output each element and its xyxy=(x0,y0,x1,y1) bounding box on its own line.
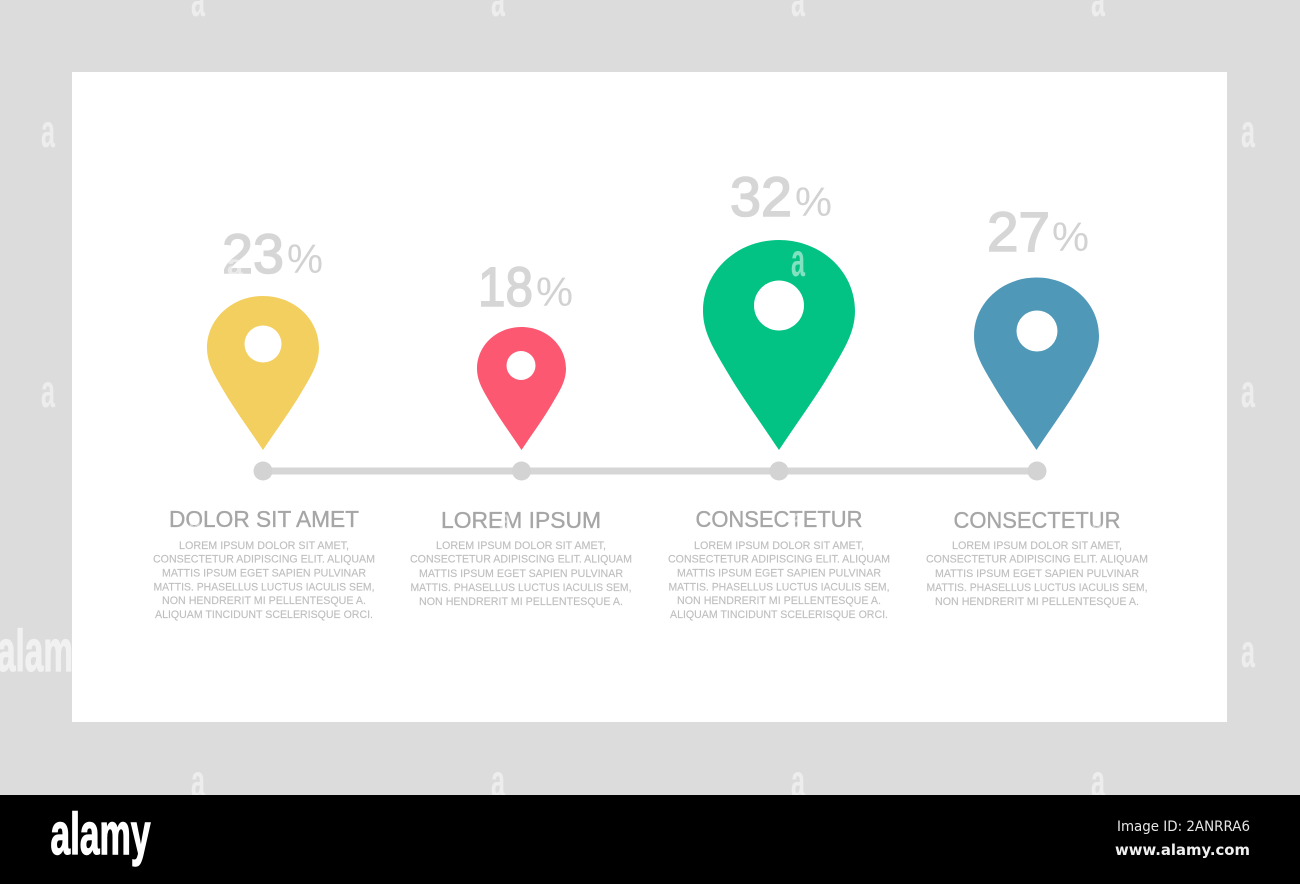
body text xyxy=(926,540,1148,608)
heading: a xyxy=(189,503,201,536)
heading: a xyxy=(1092,504,1102,537)
icon: green pin: a xyxy=(791,234,805,286)
body text xyxy=(410,540,632,608)
item 4: 27% consectetur xyxy=(926,200,1148,608)
body text: MATTIS IPSUM EGET SAPIEN PULVINAR xyxy=(419,568,623,580)
icon: blue pin xyxy=(974,278,1099,450)
body text: LOREM IPSUM DOLOR SIT AMET, xyxy=(436,540,606,552)
body text: MATTIS IPSUM EGET SAPIEN PULVINAR xyxy=(935,568,1139,580)
item 1: 23% dolor sit amet xyxy=(153,222,375,621)
timeline xyxy=(254,462,1046,480)
body text: LOREM IPSUM DOLOR SIT AMET, xyxy=(694,540,864,552)
percentage 18: 18 xyxy=(478,255,533,318)
icon: green pin xyxy=(703,234,855,450)
percentage 23 xyxy=(222,222,323,285)
heading: CONSECTETUR xyxy=(954,507,1120,533)
watermark fragments: a xyxy=(1241,105,1255,157)
icon: red pin xyxy=(477,327,566,450)
percentage 32: 32 xyxy=(730,165,792,228)
watermark fragments: a xyxy=(491,755,505,807)
percentage 27: 27 xyxy=(987,200,1050,263)
alamy logo: alamy xyxy=(50,802,150,867)
body text: ALIQUAM TINCIDUNT SCELERISQUE ORCI. xyxy=(155,609,373,621)
percentage 27: % xyxy=(1052,214,1089,260)
body text: MATTIS IPSUM EGET SAPIEN PULVINAR xyxy=(162,568,366,580)
percentage 32: % xyxy=(795,179,832,225)
body text: NON HENDRERIT MI PELLENTESQUE A. xyxy=(162,595,366,607)
body text: CONSECTETUR ADIPISCING ELIT. ALIQUAM xyxy=(153,554,375,566)
image id: Image ID: 2ANRRA6 xyxy=(1117,819,1250,835)
body text xyxy=(668,540,890,621)
icon: yellow pin xyxy=(207,296,319,450)
heading: DOLOR SIT AMET xyxy=(169,506,359,532)
body text: CONSECTETUR ADIPISCING ELIT. ALIQUAM xyxy=(926,554,1148,566)
percentage 23: % xyxy=(287,236,323,282)
body text: LOREM IPSUM DOLOR SIT AMET, xyxy=(952,540,1122,552)
percentage 32 xyxy=(730,165,832,228)
percentage 23: a xyxy=(227,249,243,282)
body text: LOREM IPSUM DOLOR SIT AMET, xyxy=(179,540,349,552)
footer bar xyxy=(0,795,1300,884)
body text: ALIQUAM TINCIDUNT SCELERISQUE ORCI. xyxy=(670,609,888,621)
body text: NON HENDRERIT MI PELLENTESQUE A. xyxy=(677,595,881,607)
watermark fragments: a xyxy=(1241,625,1255,677)
watermark fragments: a xyxy=(191,755,205,807)
watermark fragments: a xyxy=(41,105,55,157)
percentage 18 xyxy=(478,255,573,318)
watermark fragments: a xyxy=(791,755,805,807)
body text xyxy=(153,540,375,621)
item 3: 32% consectetur xyxy=(668,165,890,621)
watermark fragments: a xyxy=(41,365,55,417)
body text: MATTIS IPSUM EGET SAPIEN PULVINAR xyxy=(677,568,881,580)
body text: MATTIS. PHASELLUS LUCTUS IACULIS SEM, xyxy=(154,582,374,594)
website: www.alamy.com xyxy=(1115,841,1250,859)
percentage 23: 23 xyxy=(222,222,284,285)
watermark fragments: a xyxy=(1091,755,1105,807)
body text: CONSECTETUR ADIPISCING ELIT. ALIQUAM xyxy=(668,554,890,566)
body text: MATTIS. PHASELLUS LUCTUS IACULIS SEM, xyxy=(926,582,1148,594)
heading: CONSECTETUR xyxy=(696,506,862,532)
percentage 27 xyxy=(987,200,1089,263)
body text: NON HENDRERIT MI PELLENTESQUE A. xyxy=(935,596,1139,608)
body text: MATTIS. PHASELLUS LUCTUS IACULIS SEM, xyxy=(410,582,632,594)
body text: MATTIS. PHASELLUS LUCTUS IACULIS SEM, xyxy=(668,582,890,594)
watermark fragments: a xyxy=(1241,365,1255,417)
percentage 18: % xyxy=(536,269,573,315)
item 2: 18% lorem ipsum xyxy=(410,255,632,608)
white panel xyxy=(72,72,1227,722)
body text: NON HENDRERIT MI PELLENTESQUE A. xyxy=(419,596,623,608)
heading: a xyxy=(499,504,511,537)
heading: LOREM IPSUM xyxy=(441,507,601,533)
watermark fragments: alam xyxy=(0,619,73,684)
body text: CONSECTETUR ADIPISCING ELIT. ALIQUAM xyxy=(410,554,632,566)
heading: a xyxy=(792,503,802,536)
